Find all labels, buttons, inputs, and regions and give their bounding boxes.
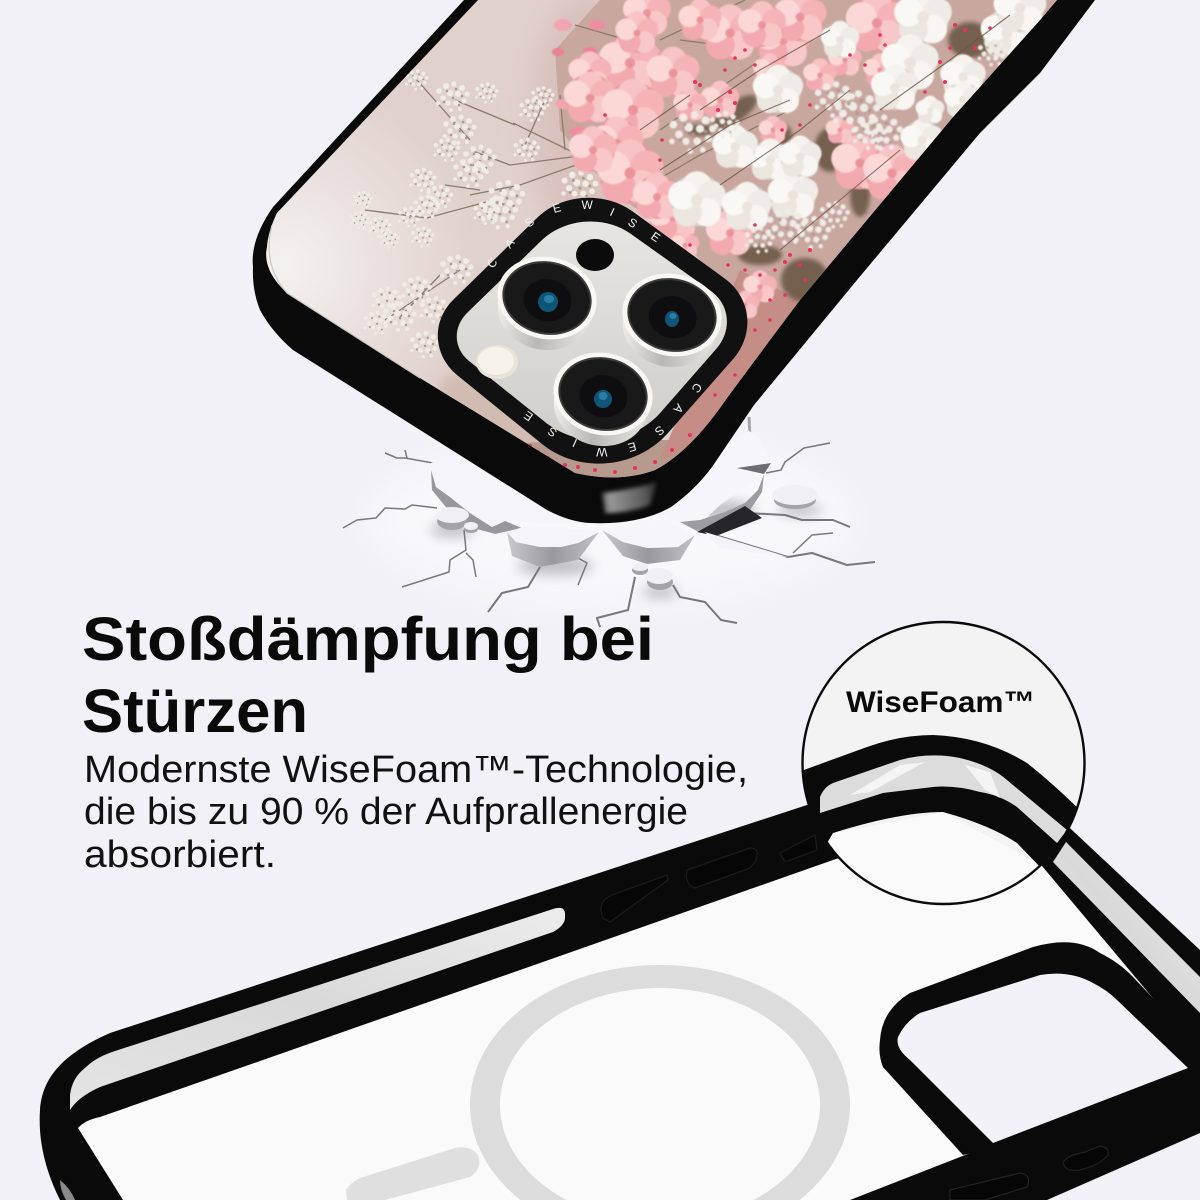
left raised piece <box>431 470 522 534</box>
crack shadows <box>430 490 822 598</box>
dark stems zone <box>686 22 992 302</box>
magnifier label: WiseFoam™ <box>846 686 1035 719</box>
stems <box>365 0 790 320</box>
lens: bottom <box>543 344 660 455</box>
side slot: right <box>1053 842 1200 1013</box>
body text: die bis zu 90 % der Aufprallenergie <box>84 791 688 833</box>
pink flowers <box>564 0 921 318</box>
illustration: cracked ground <box>343 417 875 627</box>
baby's breath over flowers <box>669 39 1008 254</box>
flash <box>476 345 518 379</box>
centre-right chunk <box>602 530 695 564</box>
side slot: left <box>70 908 565 1110</box>
rock fragments <box>435 485 818 590</box>
gypsophila branches <box>350 69 598 358</box>
clear case: lower frame <box>40 760 1200 1200</box>
phone with floral case <box>250 0 1095 523</box>
white flowers <box>668 0 1046 230</box>
MagSafe alignment bar <box>346 1147 479 1200</box>
microphone hole <box>576 239 614 271</box>
camera cut-out <box>898 974 1188 1143</box>
right raised piece <box>650 430 768 530</box>
magnifier outline <box>802 622 1084 904</box>
camera cut-out frame <box>879 942 1200 1155</box>
magnified frame band <box>804 735 1076 866</box>
lens: right <box>612 265 729 376</box>
crack lines <box>343 417 875 627</box>
body text: Modernste WiseFoam™-Technologie, <box>84 749 748 791</box>
pink buds <box>552 19 605 138</box>
bottom port details <box>60 1146 1108 1200</box>
body text: absorbiert. <box>84 834 276 876</box>
casewise engraving bottom: CASEWISE <box>521 380 705 459</box>
floral photo <box>250 0 1080 490</box>
side buttons <box>601 835 817 922</box>
case shine <box>602 482 657 513</box>
lens: top left <box>487 248 604 359</box>
body text <box>84 749 748 876</box>
heading: Stürzen <box>82 677 308 745</box>
camera surround <box>438 198 747 464</box>
case inner edge highlight <box>269 225 420 378</box>
camera plate <box>457 221 727 440</box>
frame body <box>40 760 1200 1200</box>
magnifier background <box>802 622 1084 904</box>
clear back panel <box>78 818 1188 1200</box>
fine stems over flowers <box>640 15 1010 250</box>
magenta buds <box>528 23 992 474</box>
case body <box>253 0 1095 523</box>
MagSafe ring <box>470 965 850 1200</box>
heading <box>82 605 654 745</box>
flowers <box>552 0 1046 318</box>
casewise engraving top: CASEWISE <box>484 198 663 271</box>
magnifier: WiseFoam detail <box>790 622 1090 920</box>
centre-left chunk <box>507 532 599 567</box>
ground glow <box>370 435 850 605</box>
heading: Stoßdämpfung bei <box>82 605 654 673</box>
magnified foam channel <box>820 755 1067 843</box>
magnified panel <box>800 812 1060 920</box>
